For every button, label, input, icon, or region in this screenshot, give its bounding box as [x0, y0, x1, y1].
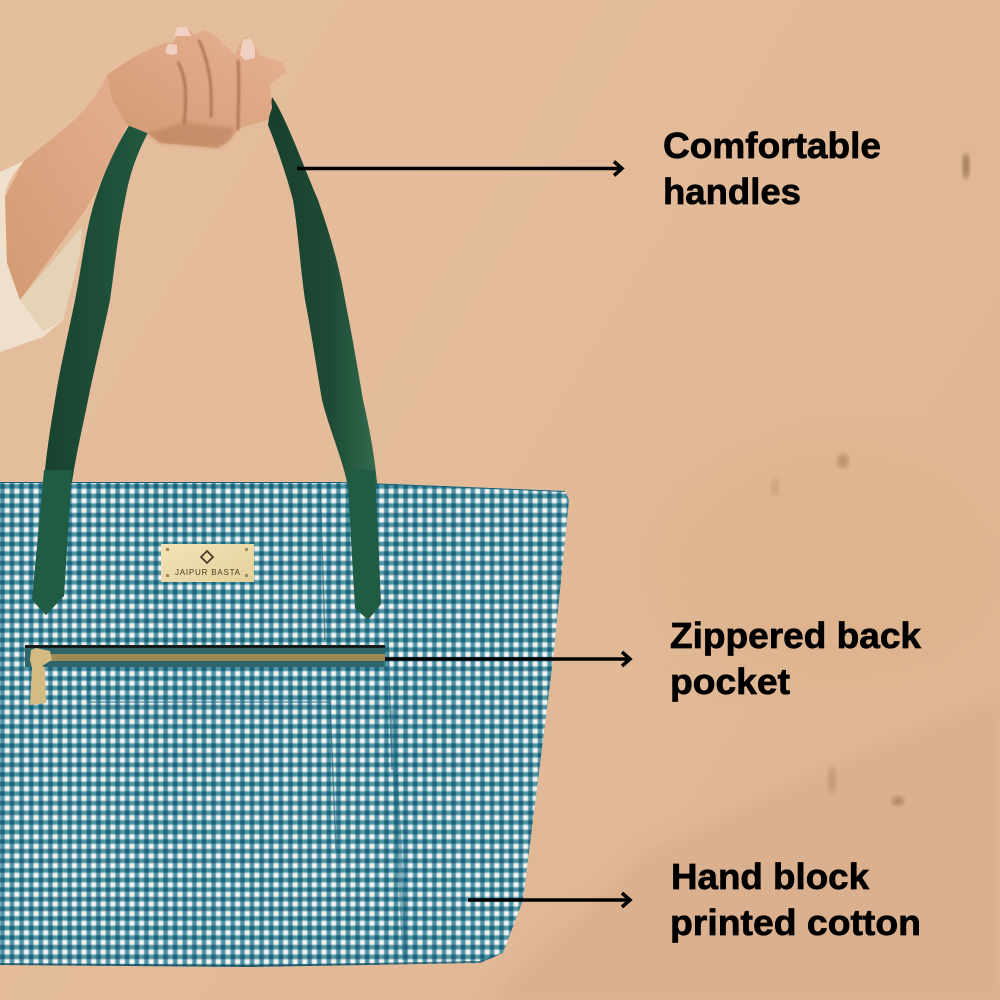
plate emblem [201, 551, 213, 563]
arrow: comfortable handles [297, 162, 622, 176]
arm and sleeve [0, 60, 150, 352]
label: comfortable handles: Comfortable [663, 125, 881, 166]
hand gripping handles [107, 27, 286, 148]
zipper pull [30, 648, 52, 705]
right strap tab [347, 470, 381, 620]
left strap tab [32, 470, 72, 615]
palm shadow [147, 122, 236, 148]
tote bag body [0, 475, 575, 975]
vertical bag fold [392, 710, 405, 960]
forearm [5, 60, 150, 300]
fingernails [165, 27, 255, 60]
label: hand block printed cotton: Hand block [671, 856, 870, 897]
sleeve [0, 161, 82, 352]
plate rivets [166, 548, 248, 577]
finger shadows [178, 40, 239, 130]
brand plate [161, 544, 254, 582]
arrow: zippered back pocket [385, 652, 630, 666]
left handle [32, 92, 157, 615]
bottom hem [0, 955, 500, 966]
sleeve inner [20, 227, 82, 332]
label: hand block printed cotton: printed cotton [670, 902, 921, 943]
plate brand name: JAIPUR BASTA [175, 568, 241, 577]
arrow: hand block printed cotton [468, 893, 630, 907]
zipper [25, 645, 385, 705]
right handle [268, 97, 381, 620]
label: zippered back pocket: pocket [670, 661, 790, 702]
bag top hem [0, 482, 565, 491]
pocket seams [88, 484, 392, 850]
label: comfortable handles: handles [663, 171, 801, 212]
label: zippered back pocket: Zippered back [670, 615, 922, 656]
